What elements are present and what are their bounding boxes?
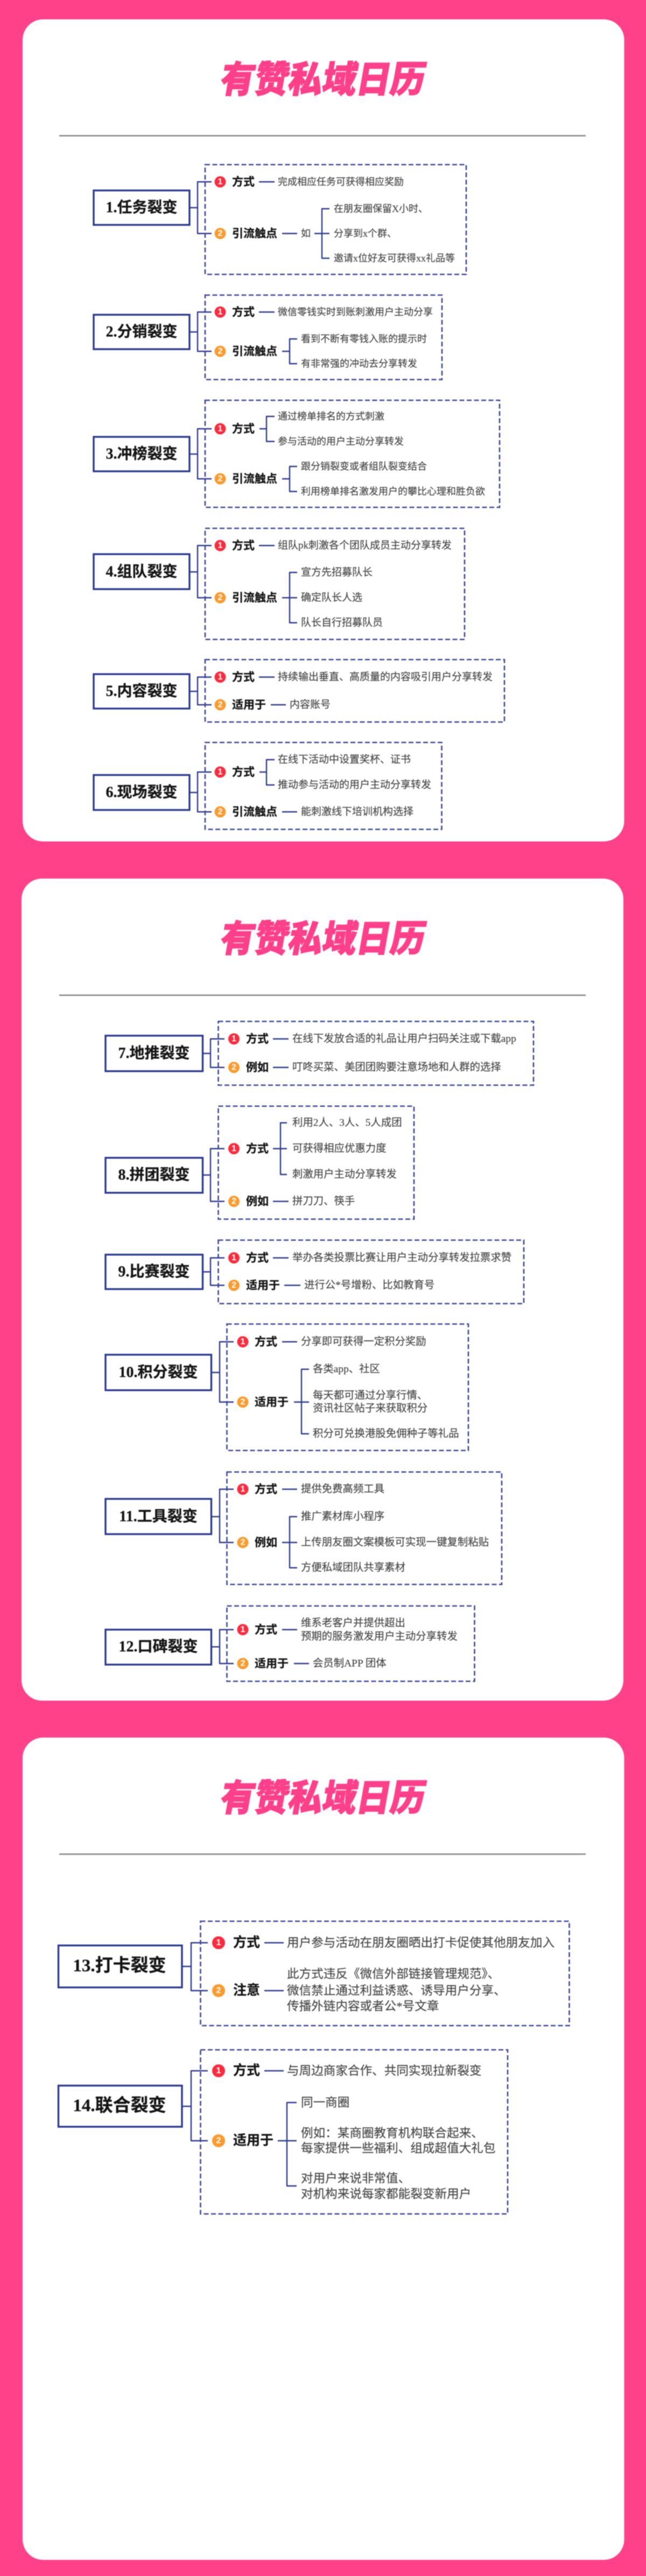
diagram 13: 方式: [233, 1935, 260, 1950]
diagram 11: 11.工具裂变: [119, 1508, 198, 1525]
diagram 13: 此方式违反《微信外部链接管理规范》、: [287, 1967, 500, 1981]
diagram 9: 进行公*号增粉、比如教育号: [304, 1279, 434, 1291]
diagram 1: 完成相应任务可获得相应奖励: [278, 176, 404, 187]
diagram 9: 方式: [246, 1251, 269, 1264]
diagram 7: 在线下发放合适的礼品让用户扫码关注或下载app: [292, 1033, 516, 1045]
diagram 7: 叮咚买菜、美团团购要注意场地和人群的选择: [292, 1061, 501, 1073]
diagram 11: 1: [241, 1485, 245, 1494]
diagram 1: 在朋友圈保留X小时、: [334, 203, 428, 214]
diagram 2: 2: [218, 346, 223, 356]
diagram 10: [106, 1324, 468, 1450]
diagram 7: 方式: [246, 1032, 269, 1045]
diagram 11: 例如: [255, 1536, 277, 1549]
diagram 12: 适用于: [255, 1657, 289, 1670]
diagram 12: 会员制APP 团体: [313, 1657, 387, 1669]
diagram 9: 适用于: [246, 1279, 280, 1292]
diagram 2: 引流触点: [232, 345, 277, 358]
diagram 6: 方式: [232, 766, 255, 779]
panel 3 divider: [59, 1853, 586, 1855]
diagram 10: 每天都可通过分享行情、: [313, 1389, 427, 1401]
diagram 11: 方便私域团队共享素材: [301, 1561, 405, 1573]
panel 1 title: 有赞私域日历: [217, 60, 429, 101]
diagram 13: 微信禁止通过利益诱惑、诱导用户分享、: [287, 1984, 506, 1997]
diagram 8: 8.拼团裂变: [118, 1166, 190, 1184]
diagram 5: 持续输出垂直、高质量的内容吸引用户分享转发: [278, 671, 493, 683]
diagram 13: 注意: [233, 1982, 260, 1998]
panel 3: [23, 1738, 624, 2560]
diagram 6: 推动参与活动的用户主动分享转发: [278, 779, 431, 791]
diagram 4: 宣方先招募队长: [301, 566, 373, 578]
diagram 13: 2: [216, 1986, 221, 1995]
diagram 14: 方式: [233, 2063, 260, 2078]
diagram 2: 1: [218, 308, 223, 316]
diagram 12: 预期的服务激发用户主动分享转发: [301, 1630, 458, 1642]
diagram 7: 7.地推裂变: [118, 1045, 190, 1062]
diagram 8: [106, 1106, 414, 1219]
diagram 5: 2: [218, 700, 223, 709]
diagram 8: 拼刀刀、筷手: [292, 1195, 355, 1207]
diagram 11: [106, 1472, 502, 1584]
diagram 1: 方式: [232, 175, 255, 188]
diagram 3: 引流触点: [232, 472, 277, 485]
diagram 5: 方式: [232, 670, 255, 683]
diagram 7: 2: [231, 1063, 236, 1072]
diagram 12: 方式: [255, 1623, 277, 1636]
diagram 4: [94, 528, 465, 639]
diagram 8: 1: [231, 1144, 236, 1153]
diagram 12: 维系老客户并提供超出: [301, 1617, 405, 1629]
diagram 5: 适用于: [232, 698, 266, 711]
diagram 14: 与周边商家合作、共同实现拉新裂变: [287, 2064, 481, 2078]
panel 2 title: 有赞私域日历: [217, 919, 429, 960]
diagram 9: 举办各类投票比赛让用户主动分享转发拉票求赞: [292, 1251, 511, 1263]
diagram 14: 例如：某商圈教育机构联合起来、: [301, 2126, 483, 2140]
diagram 3: 参与活动的用户主动分享转发: [278, 436, 404, 447]
diagram 7: [106, 1021, 533, 1085]
diagram 8: 方式: [246, 1142, 269, 1155]
diagram 13: 13.打卡裂变: [73, 1956, 166, 1976]
diagram 10: 各类app、社区: [313, 1363, 380, 1375]
diagram 14: 对用户来说非常值、: [301, 2171, 410, 2185]
diagram 7: 1: [231, 1034, 236, 1044]
diagram 10: 适用于: [255, 1396, 289, 1409]
diagram 6: 在线下活动中设置奖杯、证书: [278, 753, 411, 765]
panel 3 title: 有赞私域日历: [217, 1778, 429, 1819]
panel 2: [22, 879, 623, 1701]
diagram 11: 推广素材库小程序: [301, 1511, 384, 1523]
diagram 4: 组队pk刺激各个团队成员主动分享转发: [278, 539, 452, 551]
diagram 8: 利用2人、3人、5人成团: [292, 1117, 402, 1129]
diagram 2: 微信零钱实时到账刺激用户主动分享: [278, 307, 433, 317]
diagram 14: 对机构来说每家都能裂变新用户: [301, 2188, 471, 2200]
diagram 5: 5.内容裂变: [106, 682, 178, 699]
diagram 12: 12.口碑裂变: [118, 1638, 198, 1655]
diagram 1: 1: [218, 178, 223, 186]
diagram 6: [94, 742, 441, 830]
diagram 3: 跟分销裂变或者组队裂变结合: [301, 461, 427, 472]
diagram 13: [58, 1921, 570, 2026]
diagram 14: 适用于: [233, 2133, 273, 2148]
diagram 12: 2: [241, 1659, 245, 1668]
diagram 3: 方式: [232, 422, 255, 435]
diagram 9: [106, 1240, 524, 1304]
diagram 6: 引流触点: [232, 805, 277, 818]
diagram 3: 1: [218, 424, 223, 434]
diagram 14: 2: [216, 2136, 221, 2146]
diagram 5: 1: [218, 673, 223, 682]
diagram 1: 1.任务裂变: [106, 199, 178, 216]
diagram 2: 2.分销裂变: [106, 323, 178, 340]
diagram 6: 能刺激线下培训机构选择: [301, 806, 413, 818]
panel 3 card: [23, 1738, 624, 2560]
diagram 1: 引流触点: [232, 227, 277, 240]
diagram 4: 方式: [232, 539, 255, 552]
diagram 4: 1: [218, 541, 223, 550]
diagram 2: 方式: [232, 306, 255, 319]
diagram 14: 14.联合裂变: [73, 2096, 166, 2115]
diagram 1: 邀请x位好友可获得xx礼品等: [334, 253, 455, 264]
diagram 10: 积分可兑换港股免佣种子等礼品: [313, 1428, 459, 1440]
diagram 14: 每家提供一些福利、组成超值大礼包: [301, 2141, 495, 2155]
diagram 1: 如: [301, 228, 311, 239]
panel 1: [23, 19, 624, 841]
diagram 14: [58, 2050, 508, 2214]
diagram 3: [94, 400, 500, 507]
diagram 13: 用户参与活动在朋友圈晒出打卡促使其他朋友加入: [287, 1936, 554, 1950]
panel 1 divider: [59, 135, 586, 137]
diagram 6: 1: [218, 767, 223, 777]
diagram 10: 资讯社区帖子来获取积分: [313, 1402, 427, 1414]
diagram 7: 例如: [246, 1061, 269, 1074]
diagram 1: 分享到x个群、: [334, 228, 397, 239]
diagram 3: 通过榜单排名的方式刺激: [278, 411, 384, 422]
diagram 5: [94, 660, 504, 722]
panel 2 card: [22, 879, 623, 1701]
diagram 2: [94, 295, 442, 380]
diagram 11: 提供免费高频工具: [301, 1483, 384, 1495]
diagram 9: 2: [231, 1280, 236, 1290]
diagram 9: 9.比赛裂变: [118, 1262, 190, 1280]
diagram 13: 1: [216, 1938, 221, 1948]
diagram 6: 2: [218, 807, 223, 817]
diagram 3: 3.冲榜裂变: [106, 445, 178, 463]
diagram 12: 1: [241, 1625, 245, 1634]
diagram 11: 方式: [255, 1483, 277, 1496]
diagram 3: 利用榜单排名激发用户的攀比心理和胜负欲: [301, 486, 485, 497]
diagram 4: 引流触点: [232, 591, 277, 604]
diagram 8: 可获得相应优惠力度: [292, 1143, 387, 1155]
diagram 10: 1: [241, 1337, 245, 1346]
diagram 11: 2: [241, 1538, 245, 1547]
diagram 10: 10.积分裂变: [118, 1363, 198, 1381]
diagram 4: 确定队长人选: [301, 592, 362, 604]
diagram 2: 看到不断有零钱入账的提示时: [301, 334, 427, 344]
panel 1 card: [23, 19, 624, 841]
diagram 10: 分享即可获得一定积分奖励: [301, 1335, 426, 1347]
diagram 4: 2: [218, 593, 223, 603]
diagram 9: 1: [231, 1254, 236, 1262]
diagram 11: 上传朋友圈文案模板可实现一键复制粘贴: [301, 1537, 489, 1548]
diagram 4: 4.组队裂变: [106, 563, 178, 580]
diagram 2: 有非常强的冲动去分享转发: [301, 358, 417, 369]
diagram 10: 2: [241, 1398, 245, 1406]
diagram 13: 传播外链内容或者公*号文章: [287, 1999, 439, 2013]
panel 2 divider: [59, 994, 586, 996]
diagram 8: 刺激用户主动分享转发: [292, 1169, 397, 1180]
diagram 14: 同一商圈: [301, 2096, 349, 2109]
diagram 1: [94, 165, 466, 274]
diagram 4: 队长自行招募队员: [301, 617, 383, 628]
diagram 8: 例如: [246, 1195, 269, 1208]
diagram 1: 2: [218, 229, 223, 238]
diagram 3: 2: [218, 475, 223, 483]
diagram 14: 1: [216, 2066, 221, 2076]
diagram 10: 方式: [255, 1335, 277, 1348]
diagram 12: [106, 1606, 475, 1681]
diagram 8: 2: [231, 1197, 236, 1206]
diagram 6: 6.现场裂变: [106, 783, 178, 801]
diagram 5: 内容账号: [290, 698, 331, 710]
